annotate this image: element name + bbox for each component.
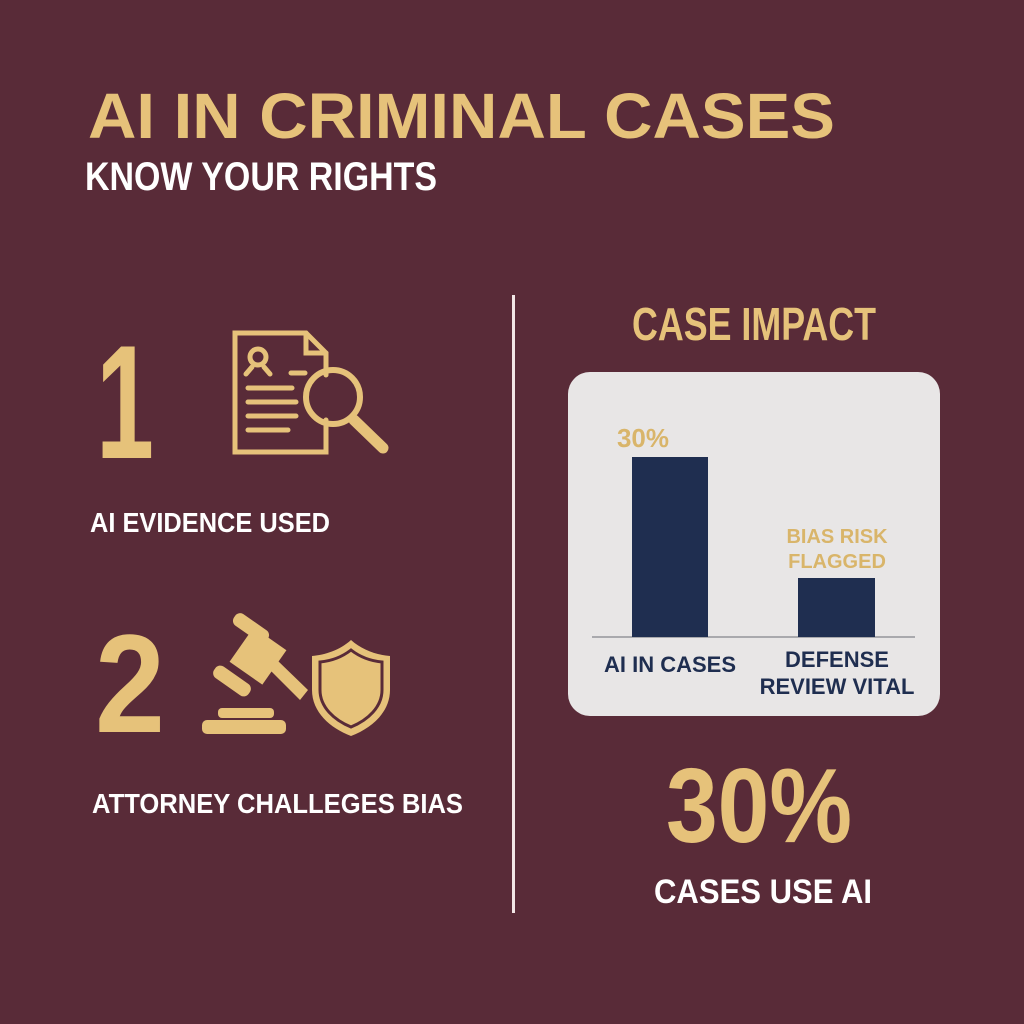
bar value 30%: 30% [617, 423, 669, 453]
axis label: AI in cases: AI IN CASES [604, 652, 736, 677]
stat label: CASES USE AI [654, 873, 872, 911]
subtitle: KNOW YOUR RIGHTS [85, 155, 437, 199]
axis label: defense review vital: DEFENSE [785, 647, 889, 672]
number 1: 1 [96, 312, 154, 493]
axis label: defense review vital: REVIEW VITAL [760, 674, 914, 699]
label: AI evidence used: AI EVIDENCE USED [90, 507, 330, 538]
bar annotation: bias risk flagged: BIAS RISK [786, 526, 888, 548]
item 2 [92, 605, 463, 819]
bar annotation: bias risk flagged: FLAGGED [788, 551, 886, 573]
big stat 30%: 30% [666, 747, 852, 865]
number 2: 2 [95, 605, 165, 762]
icon: document with magnifier [235, 333, 383, 452]
heading: case impact: CASE IMPACT [632, 298, 876, 350]
bar chart panel [568, 372, 940, 716]
icon: gavel [202, 611, 308, 734]
bar: defense review [798, 578, 875, 637]
icon: shield [312, 640, 390, 736]
title: AI IN CRIMINAL CASES [88, 80, 835, 152]
item 1 [90, 312, 383, 538]
bar: AI in cases [632, 457, 708, 637]
label: attorney challenges bias: ATTORNEY CHALLEGES BIAS [92, 788, 463, 819]
